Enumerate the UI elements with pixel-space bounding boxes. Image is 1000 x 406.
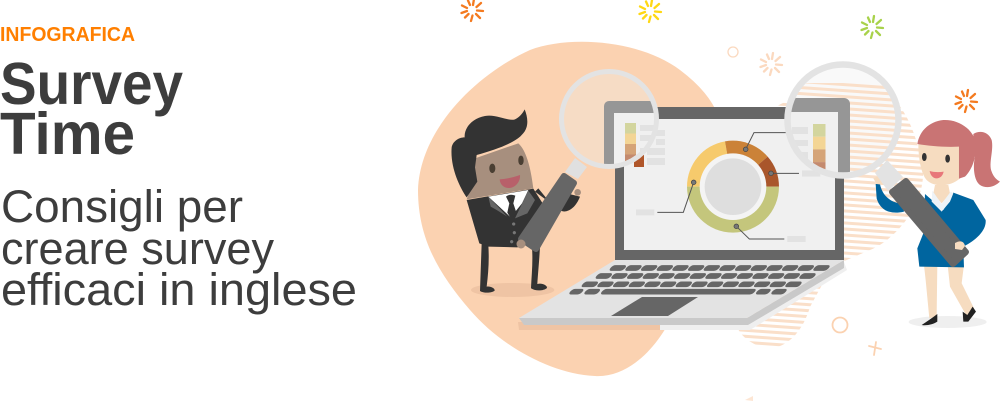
ferrule — [565, 158, 587, 179]
circle small — [728, 47, 738, 57]
laptop trackpad — [611, 297, 698, 316]
woman hair — [917, 120, 976, 179]
ferrule — [875, 160, 903, 191]
donut inner ring — [700, 153, 766, 220]
woman neck — [933, 185, 950, 203]
laptop screen — [624, 119, 835, 250]
woman jacket — [917, 193, 986, 267]
man mouth — [500, 175, 520, 188]
laptop shadow on white — [660, 262, 847, 330]
brown chip — [634, 155, 644, 167]
laptop base side — [519, 260, 844, 325]
spark: orange right — [956, 90, 977, 112]
lens ring — [788, 64, 898, 176]
legend bars left — [647, 130, 665, 165]
heading: text block — [0, 24, 357, 315]
laptop base shadow — [518, 322, 660, 330]
segment: yellow — [687, 141, 733, 187]
lens glass — [787, 64, 899, 176]
donut chart — [636, 133, 820, 242]
circle large — [832, 318, 848, 332]
magnifier right — [775, 64, 966, 264]
handle — [892, 181, 966, 264]
woman ear — [957, 157, 963, 163]
magnified laptop — [604, 101, 654, 164]
decorative sparks and shapes — [462, 0, 977, 401]
subtitle: efficaci in inglese — [1, 264, 357, 315]
magnified swatches — [625, 123, 636, 161]
laptop bezel — [615, 107, 844, 260]
character: businesswoman — [873, 120, 1000, 328]
swatch clay — [813, 162, 826, 170]
laptop palmrest — [519, 260, 844, 318]
man jacket — [467, 189, 543, 247]
title: Survey — [0, 51, 183, 117]
swatch green — [625, 123, 636, 134]
man face — [467, 143, 533, 199]
man eyes — [489, 156, 524, 173]
laptop keyboard — [573, 268, 830, 292]
label: INFOGRAFICA: INFOGRAFICA — [0, 24, 135, 46]
woman mouth — [930, 171, 944, 178]
swatch orange — [625, 144, 636, 154]
man lapels — [488, 191, 535, 218]
handle — [521, 176, 574, 249]
woman ponytail — [973, 132, 1000, 187]
key row 1 — [613, 259, 830, 276]
woman shadow — [909, 316, 987, 328]
spark: orange — [462, 0, 483, 21]
striped background blob — [737, 84, 923, 348]
peach background blob — [418, 42, 720, 376]
man hand behind — [574, 189, 581, 196]
magnified panel — [791, 98, 850, 172]
donut hub — [705, 158, 761, 215]
woman arm raised — [876, 184, 904, 213]
spark: pale peach — [760, 53, 782, 75]
woman hand raised — [873, 175, 884, 185]
swatch yellow — [813, 137, 826, 149]
magnified screen — [790, 112, 838, 172]
magnified bars — [792, 127, 808, 158]
swatch green — [813, 124, 826, 137]
magnifier left — [516, 72, 664, 249]
segment: orange — [725, 141, 768, 187]
man buttons — [510, 222, 516, 243]
woman shoes — [922, 307, 976, 325]
cross mark — [869, 342, 881, 355]
hand on handle — [516, 240, 526, 248]
spark: green — [862, 16, 883, 38]
woman collar — [932, 191, 953, 212]
laptop — [518, 107, 847, 330]
man tie — [506, 195, 517, 219]
lens stripes — [791, 83, 896, 172]
segment: green — [687, 187, 779, 233]
subtitle: Consigli per — [1, 181, 243, 232]
man ear — [470, 167, 477, 175]
key row 4 — [573, 283, 783, 300]
subtitle: creare survey — [1, 223, 274, 274]
man shirt — [488, 190, 528, 217]
hand on handle — [955, 241, 965, 250]
segment: brown — [733, 157, 779, 187]
leader dots — [691, 147, 773, 229]
swatch yellow — [625, 134, 636, 144]
woman face — [918, 143, 960, 185]
chart labels — [636, 170, 820, 242]
title: Time — [0, 101, 135, 167]
woman legs — [924, 265, 974, 318]
spark: yellow — [640, 0, 661, 22]
key row 2 — [599, 267, 816, 284]
man arm behind — [535, 188, 580, 211]
lens ring — [562, 72, 656, 166]
swatch clay — [625, 154, 636, 161]
stripes inside lens — [796, 83, 896, 171]
small triangle mark — [745, 396, 753, 401]
man shadow — [471, 283, 554, 297]
magnified swatches — [813, 124, 826, 172]
woman eyes — [922, 153, 950, 163]
magnified bars — [640, 125, 654, 152]
magnified screen — [614, 113, 654, 164]
man legs and shoes — [480, 243, 547, 293]
magnified panel — [604, 101, 654, 164]
key row 3 — [585, 276, 802, 293]
character: businessman — [451, 109, 581, 297]
man hair — [451, 109, 527, 197]
swatch orange — [813, 149, 826, 162]
lens glass — [562, 72, 656, 166]
leader lines — [657, 133, 799, 239]
